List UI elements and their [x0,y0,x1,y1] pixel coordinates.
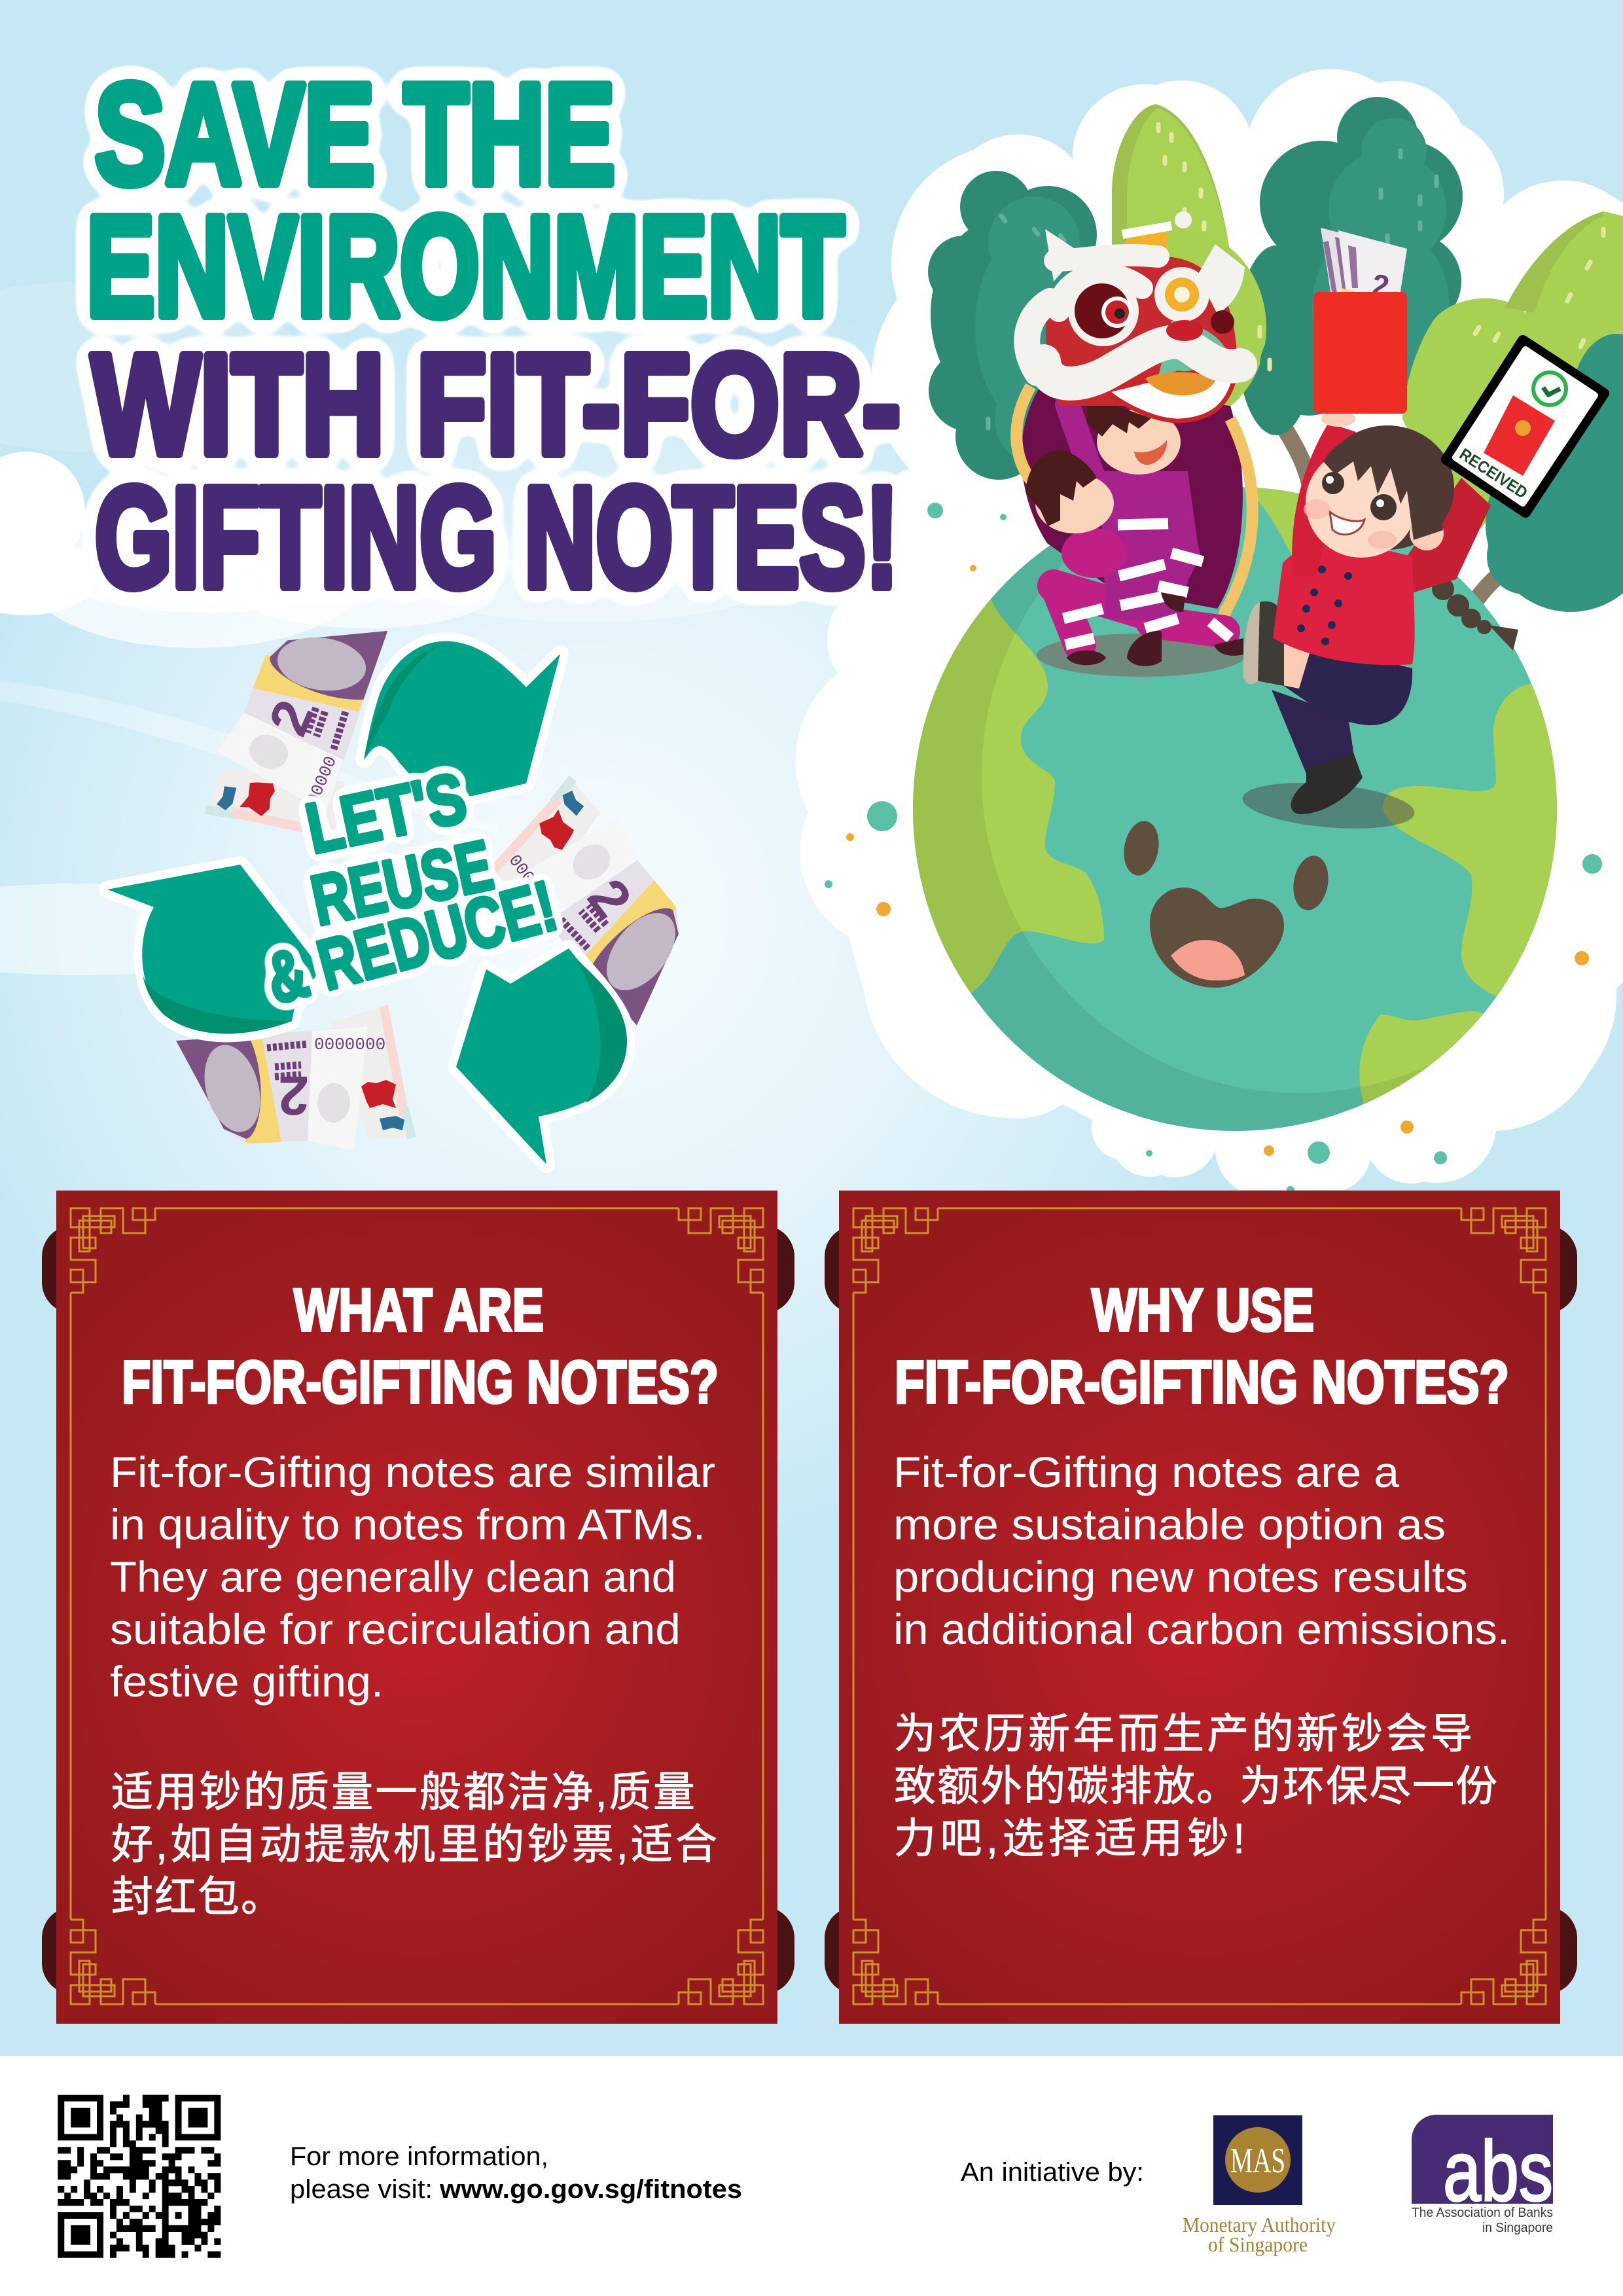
slogan: REUSE [305,825,499,940]
left arm [1292,423,1356,576]
banknote top: 0000000 [293,753,339,826]
front child legs [1054,586,1224,645]
leaf dots [1158,124,1603,369]
arrow top [364,641,560,800]
english text: Fit-for-Gifting notes are similar [110,1448,715,1496]
face base [1046,257,1237,406]
jacket buttons [1297,565,1352,645]
heading: WHAT ARE [294,1277,544,1344]
far eye [1211,310,1234,334]
title: ENVIRONMENT [86,187,844,346]
slogan: LET'S [300,757,473,868]
recycling graphic [107,588,724,1164]
english text [110,1448,715,1706]
logo: MAS: of Singapore [1208,2233,1308,2256]
brow and top band [1055,255,1158,311]
arrow bottom right [456,948,627,1164]
chinese text: 适用钞的质量一般都洁净,质量 [111,1768,695,1816]
lower jaw [1107,373,1235,421]
panel body [56,1191,777,2024]
face [1306,448,1417,558]
heading [122,1277,719,1416]
chinese text [111,1768,717,1920]
logo: ABS: in Singapore [1482,2221,1553,2235]
title: WITH FIT-FOR- [92,325,901,484]
left dark tree [928,171,1106,480]
nose [1166,320,1203,341]
banknote right: 0000000 [506,850,565,919]
scroll tabs [42,1225,794,1314]
banknote bottom: 0000000 [314,1035,385,1054]
panel body [839,1191,1560,2024]
white cloud blob behind earth [796,69,1623,1190]
english text: suitable for recirculation and [110,1605,681,1653]
phone packet [1484,395,1555,476]
rear child hair [1026,450,1097,526]
initiative label: An initiative by: [961,2158,1144,2187]
heading [895,1277,1509,1416]
lion head [1027,211,1245,421]
horn [1113,229,1168,262]
kicked shoe [1257,601,1284,686]
check mark [1533,372,1566,405]
centre tall light tree [1112,104,1234,288]
tree trunks [1283,425,1538,605]
ear [1410,516,1444,550]
english text: more sustainable option as [893,1500,1446,1549]
logo: ABS: The Association of Banks [1412,2206,1553,2220]
banknote right [463,767,724,1047]
cheeks [1304,499,1330,519]
lion dance children [1016,211,1253,666]
heading: FIT-FOR-GIFTING NOTES? [122,1349,719,1416]
english text: producing new notes results [893,1552,1468,1601]
received label: RECEIVED [1456,445,1531,503]
more information text: For more information, [290,2142,548,2171]
red packet [1313,292,1407,414]
chinese text: 为农历新年而生产的新钞会导 [894,1710,1472,1757]
logo: ABS: abs [1443,2123,1553,2219]
far trouser leg [1272,690,1355,774]
hair back [1321,425,1454,550]
raised thigh [1284,637,1412,725]
front child mouth [1134,440,1167,465]
earth character [913,487,1557,1131]
fringe [1323,433,1443,540]
chinese text: 致额外的碳排放。为环保尽一份 [894,1763,1497,1810]
more information text: www.go.gov.sg/fitnotes [439,2175,742,2204]
more information text [290,2142,742,2204]
hand [1321,411,1355,427]
title: GIFTING NOTES! [95,458,899,617]
qr code [58,2095,221,2258]
raised arm [1067,404,1113,517]
chinese text [894,1710,1497,1862]
earth left eye [1120,818,1163,878]
right ear fur [1198,244,1245,314]
jacket [1273,539,1415,665]
english text: in quality to notes from ATMs. [110,1500,705,1549]
lower right dark tree [1486,334,1623,612]
braid [1432,578,1491,634]
arrow left [107,865,321,1033]
braid tassel [1489,625,1518,651]
lower light tree [1090,229,1266,425]
front child body [1099,471,1198,622]
earth right eye [1289,853,1332,913]
rear child face [1035,473,1114,533]
title: SAVE THE [95,55,615,214]
logo: ABS [1412,2115,1553,2235]
gold frame [853,1208,1546,2004]
white muzzle [1044,342,1240,384]
english text [893,1448,1510,1653]
slogan: & REDUCE! [259,865,565,1018]
kicked ankle [1276,628,1312,689]
phone [1446,340,1604,512]
logo: MAS: MAS [1230,2141,1285,2180]
banknote top: 2 [257,692,325,744]
logo: MAS: Monetary Authority [1183,2213,1336,2236]
left eye [1068,276,1139,346]
centre dark tree behind lion [1237,245,1315,435]
earth mouth [1150,888,1284,988]
right arm [1407,478,1491,593]
title [86,55,901,617]
banknotes in packet [1321,228,1407,313]
confetti dots [825,503,1602,1194]
lion cloak [1022,386,1243,609]
front child hair [1087,395,1151,437]
english text: in additional carbon emissions. [893,1605,1510,1653]
footer band [0,2056,1623,2296]
banknotes in packet: 2 [1370,267,1391,303]
right eye [1154,267,1209,322]
scroll tabs [825,1225,1577,1314]
lion fringe [1016,386,1253,625]
banknote bottom [176,1005,416,1151]
earth shadow [913,546,1431,1131]
logo: MAS [1183,2115,1336,2256]
chinese text: 封红包。 [111,1873,283,1920]
eyes [1322,472,1344,494]
english text: festive gifting. [110,1657,383,1706]
earth land masses [913,487,1557,1103]
front child face [1097,409,1181,475]
english text: Fit-for-Gifting notes are a [893,1448,1399,1496]
left cheek fur [1027,301,1050,373]
frills [1063,524,1230,645]
smile [1330,512,1364,535]
chinese text: 力吧,选择适用钞! [894,1815,1245,1862]
girl with red packet [1243,228,1604,814]
gold frame [71,1208,763,2004]
shadow under lion dancers [1037,634,1246,677]
panel: what are fit-for-gifting notes [42,1191,794,2024]
panel: why use fit-for-gifting notes [825,1191,1577,2024]
banknote right: 2 [576,868,644,929]
right light tree [1402,211,1623,529]
earth tongue [1171,940,1245,980]
rear child body [1061,528,1127,578]
trees [928,97,1623,612]
left ear fur [1045,229,1080,281]
right dark tree [1260,97,1463,416]
earth globe [913,487,1557,1131]
shadow under girl [1241,777,1416,834]
banknote top [192,588,421,866]
english text: They are generally clean and [110,1552,676,1601]
more information text: please visit: [290,2175,433,2204]
banknote bottom: 2 [278,1065,309,1126]
shoe sole [1243,602,1260,684]
inner mouth [1145,372,1216,395]
background clouds [0,281,759,975]
slogan [259,757,565,1018]
standing foot [1291,753,1363,814]
chinese text: 好,如自动提款机里的钞票,适合 [111,1821,717,1868]
child shoes [1067,592,1243,666]
heading: WHY USE [1092,1277,1314,1344]
bent knee [1161,524,1201,586]
